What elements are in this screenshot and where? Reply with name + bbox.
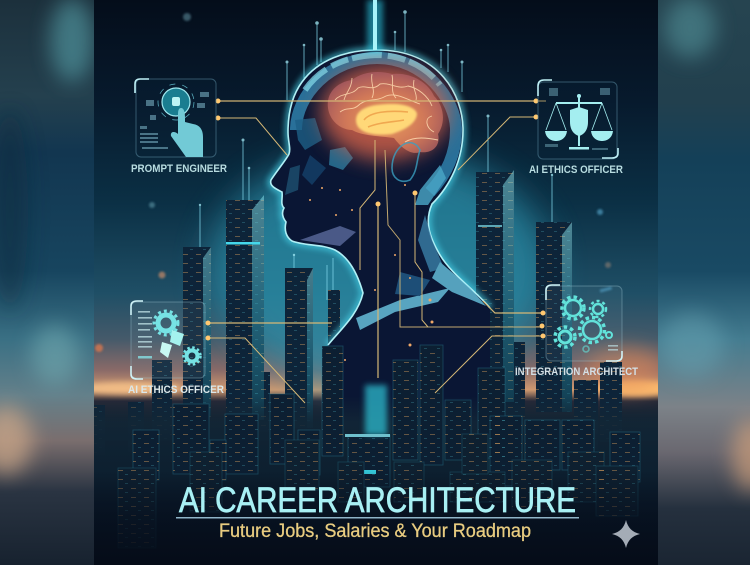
- head silhouette: [271, 50, 490, 430]
- label: AI ETHICS OFFICER: [529, 164, 623, 176]
- head fill: [271, 50, 490, 430]
- head outline: [271, 50, 490, 345]
- panel: blurred left backdrop: [0, 0, 94, 565]
- panel: integration architect: [515, 285, 638, 378]
- central light beam: [367, 0, 383, 52]
- icon: gears and gavel: [154, 311, 200, 364]
- icon: scales and shield: [545, 94, 613, 150]
- panel: prompt engineer: [131, 79, 227, 175]
- label: PROMPT ENGINEER: [131, 163, 227, 175]
- panel: main artwork: [80, 0, 675, 565]
- back skyline: [94, 170, 622, 421]
- panel: AI ethics officer (top right): [529, 80, 623, 176]
- centre teal haze: [210, 150, 550, 390]
- circuit speckle: [309, 184, 434, 361]
- horizon glow left: [80, 382, 180, 394]
- connector nodes: [206, 98, 546, 340]
- label: AI ETHICS OFFICER: [128, 384, 224, 396]
- foreground skyline: [118, 434, 640, 543]
- gold circuit lines in head and connectors: [208, 101, 546, 403]
- skull rim band: [296, 58, 456, 192]
- ear outline: [392, 143, 420, 181]
- bokeh particles: [95, 13, 612, 352]
- subtitle: Future Jobs, Salaries & Your Roadmap: [219, 521, 531, 542]
- glow inside skull: [321, 64, 449, 160]
- icon: gears: [555, 297, 612, 352]
- data spires above the head: [199, 10, 553, 300]
- brain: [328, 72, 443, 153]
- city ground mass: [94, 398, 658, 474]
- icon: touch target and pointing hand: [158, 84, 203, 157]
- title divider: [176, 517, 579, 518]
- label: INTEGRATION ARCHITECT: [515, 366, 638, 378]
- skull facets: [285, 118, 486, 330]
- horizon glow right: [595, 380, 675, 396]
- panel: AI ethics officer (bottom left): [128, 301, 224, 396]
- mid skyline: [133, 345, 640, 487]
- title: AI CAREER ARCHITECTURE: [179, 481, 576, 520]
- icon: sparkle watermark: [612, 520, 640, 548]
- glowing temporal lobe: [356, 104, 417, 135]
- panel: blurred right backdrop: [658, 0, 750, 565]
